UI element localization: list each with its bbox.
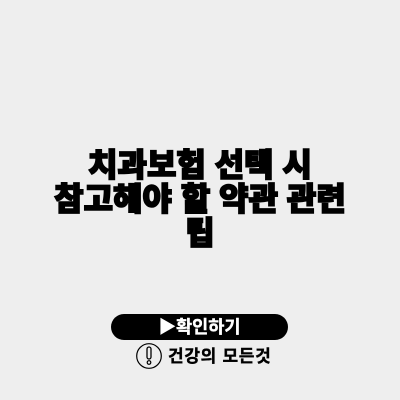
site label <box>136 343 271 369</box>
button: confirm <box>111 314 288 340</box>
title: 치과보험 선택 시 <box>88 147 312 183</box>
title <box>54 147 346 251</box>
title: 참고해야 할 약관 관련 <box>54 181 346 217</box>
title: 팁 <box>185 215 215 251</box>
site name: 건강의 모든것 <box>168 347 271 366</box>
button: confirm: ▶확인하기 <box>159 317 240 337</box>
icon: exclamation circle <box>136 343 162 369</box>
